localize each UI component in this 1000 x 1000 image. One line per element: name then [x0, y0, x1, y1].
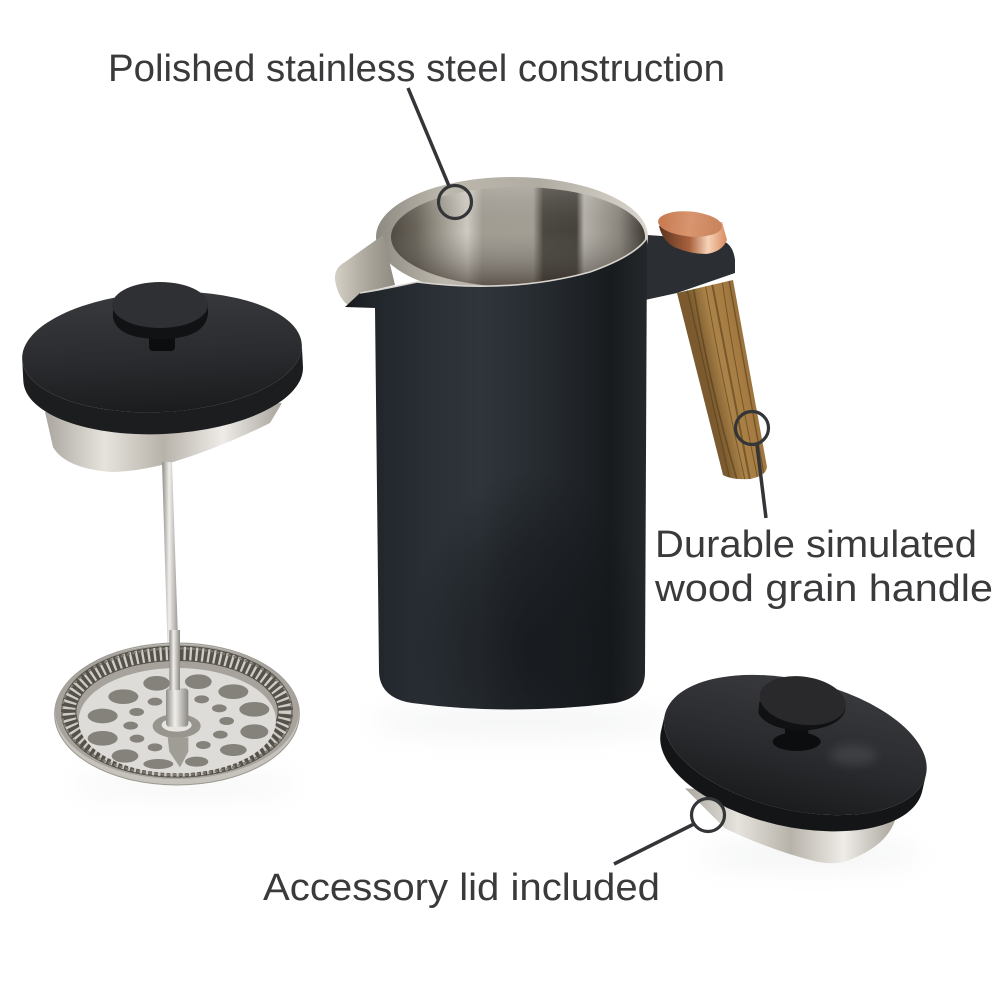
rod end	[169, 630, 180, 690]
accessory knob	[758, 702, 845, 731]
carafe handle	[645, 209, 767, 480]
copper cap top	[657, 209, 723, 239]
filter collar	[166, 688, 188, 727]
filter centre reflection	[168, 737, 188, 767]
accessory lid top	[650, 652, 941, 838]
floor shadows	[70, 710, 920, 867]
plunger lid rim	[22, 345, 306, 441]
filter mesh holes	[88, 674, 269, 769]
illustration: plunger	[19, 282, 306, 695]
carafe body	[345, 238, 647, 710]
carafe lower shading	[440, 526, 622, 710]
carafe spout	[335, 235, 395, 305]
accessory lid sheen	[830, 745, 877, 765]
plunger steel underside	[45, 403, 282, 472]
plunger knob	[113, 304, 208, 339]
plunger knob stem	[149, 330, 175, 351]
label: handle: wood grain handle	[654, 568, 993, 610]
illustration: filter disc	[55, 630, 299, 785]
callout pointer: accessory lid	[614, 798, 724, 864]
copper cap side	[659, 222, 727, 254]
label: handle	[654, 524, 993, 610]
accessory lid body	[646, 652, 941, 855]
title: polished steel callout label: Polished stainless steel construction	[108, 48, 725, 90]
accessory lid rim	[646, 715, 926, 855]
plunger lid	[19, 285, 306, 441]
accessory knob stem shadow	[773, 732, 821, 751]
filter plate	[79, 668, 276, 773]
accessory lid steel underside	[685, 788, 897, 863]
plunger rod	[162, 462, 180, 695]
plunger lid top	[19, 285, 305, 419]
filter centre base	[153, 714, 201, 738]
callout pointer: handle	[736, 412, 768, 518]
callout pointer: steel	[408, 88, 472, 218]
carafe lip highlight	[360, 238, 647, 293]
accessory knob stem	[785, 725, 808, 742]
illustration: french press carafe	[335, 177, 767, 830]
carafe interior	[391, 187, 645, 287]
illustration: accessory lid	[646, 652, 941, 863]
label: accessory lid: Accessory lid included	[263, 867, 660, 909]
carafe rim	[376, 177, 648, 297]
label: handle: Durable simulated	[655, 524, 977, 566]
